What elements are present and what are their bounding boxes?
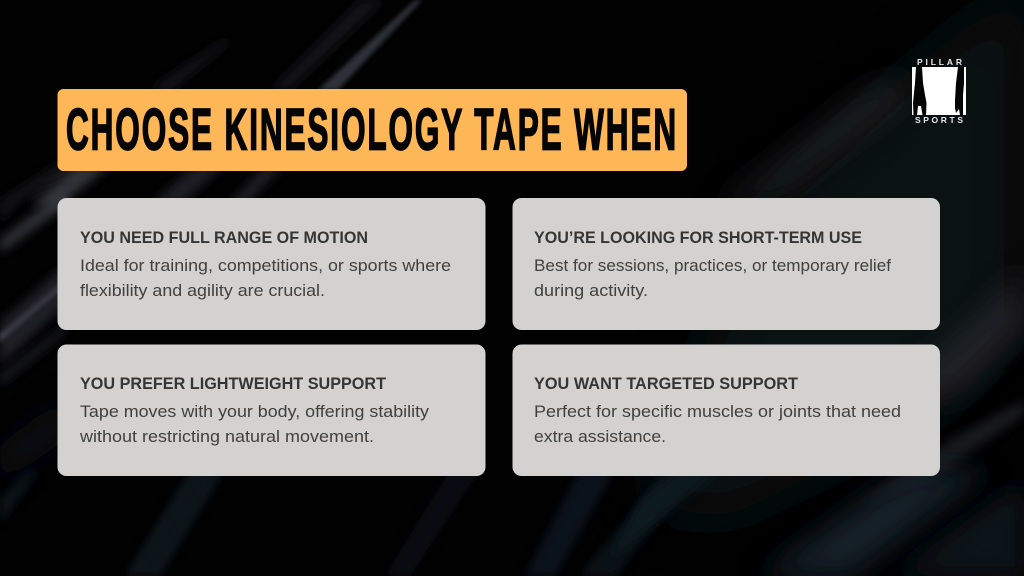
body text: during activity. — [534, 281, 648, 300]
body text — [534, 256, 891, 300]
body text: Ideal for training, competitions, or sports where — [80, 256, 451, 275]
heading: YOU NEED FULL RANGE OF MOTION — [80, 228, 368, 247]
logo word: PILLAR: PILLAR — [917, 57, 962, 67]
body text: without restricting natural movement. — [79, 427, 374, 446]
heading: YOU WANT TARGETED SUPPORT — [534, 374, 799, 393]
body text: Perfect for specific muscles or joints that need — [534, 402, 901, 421]
logo mark: white square with handstand silhouettes — [912, 67, 966, 115]
panel: full range of motion — [58, 198, 486, 330]
body text: Best for sessions, practices, or temporary relief — [534, 256, 891, 275]
heading: YOU’RE LOOKING FOR SHORT-TERM USE — [534, 228, 862, 247]
heading: YOU PREFER LIGHTWEIGHT SUPPORT — [80, 374, 387, 393]
panel: lightweight support — [58, 344, 486, 476]
body text: Tape moves with your body, offering stability — [80, 402, 430, 421]
panel: short-term use — [512, 198, 940, 330]
body text — [80, 256, 451, 300]
body text: extra assistance. — [534, 427, 666, 446]
logo: Pillar Sports — [912, 57, 966, 125]
body text — [534, 402, 901, 446]
body text — [79, 402, 430, 446]
title banner — [58, 89, 687, 171]
panel: targeted support — [512, 344, 940, 476]
logo word: SPORTS: SPORTS — [915, 115, 963, 125]
body text: flexibility and agility are crucial. — [80, 281, 325, 300]
